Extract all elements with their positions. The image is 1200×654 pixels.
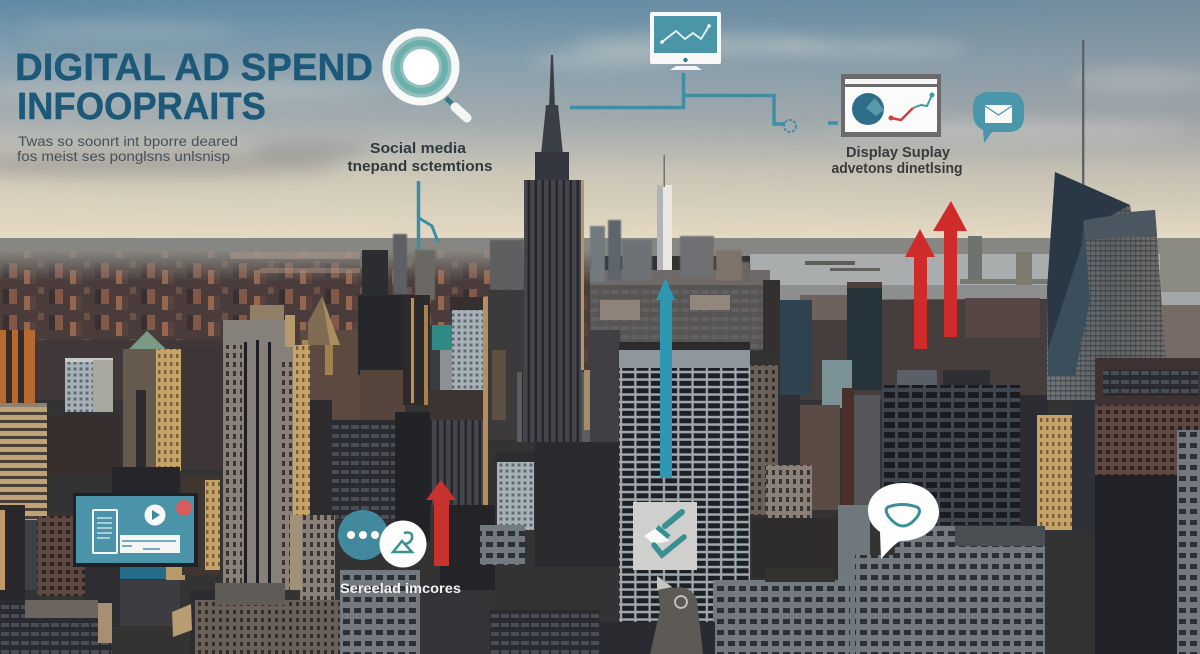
title: DIGITAL AD SPEND (15, 47, 373, 89)
gold tower with green roof (123, 331, 181, 471)
icon: chat bubble with dots (338, 510, 388, 560)
connector: monitor to browser (570, 73, 838, 132)
central window-grid building (619, 342, 750, 622)
label: social media: Social media (370, 140, 467, 157)
glass tower with spire (1047, 40, 1168, 400)
arrow: teal up (656, 278, 675, 478)
label: display advertising (832, 145, 962, 177)
brown and grey central blocks (112, 390, 620, 610)
subtitle: fos meist ses ponglsns unlsnisp (17, 149, 230, 164)
label: social media: tnepand sctemtions (348, 158, 492, 175)
foreground grey buildings (0, 430, 1200, 654)
subtitle (17, 134, 238, 164)
sky background (0, 0, 1200, 240)
ornament: grey scroll (650, 575, 703, 654)
connector: social media line (418, 181, 438, 250)
mid-ground buildings left (0, 250, 524, 520)
arrow: red left (905, 229, 935, 349)
brown building right (1095, 358, 1200, 520)
Empire State Building (517, 55, 590, 442)
right mid-ground buildings (750, 280, 1096, 578)
label: social media (348, 140, 492, 175)
water and distant horizon (0, 236, 1200, 306)
label: selected images: Sereelad imcores (340, 580, 461, 596)
large dark office building (882, 370, 1020, 525)
title (15, 47, 373, 128)
tan building left edge (0, 403, 185, 630)
far city texture (0, 250, 1200, 450)
icon: browser window with chart (841, 74, 941, 137)
icon: white circle with triangle (380, 520, 426, 568)
arrow: red bottom (426, 480, 456, 566)
icon: brush and check tile (633, 502, 697, 570)
title: INFOOPRAITS (17, 86, 266, 128)
icon: magnifying glass (386, 32, 467, 118)
beige skyscraper (223, 305, 310, 590)
label: display advertising: advetons dinetlsing (832, 161, 962, 177)
icon: video card (73, 493, 198, 567)
subtitle: Twas so soonrt int bporre deared (18, 134, 238, 149)
arrow: red right (933, 201, 967, 337)
icon: email bubble (973, 92, 1024, 143)
icon: monitor with line chart (650, 12, 721, 70)
icon: white speech bubble (868, 483, 939, 559)
label: display advertising: Display Suplay (846, 145, 950, 161)
distant towers (393, 220, 750, 300)
World Trade Center tower (657, 155, 672, 270)
